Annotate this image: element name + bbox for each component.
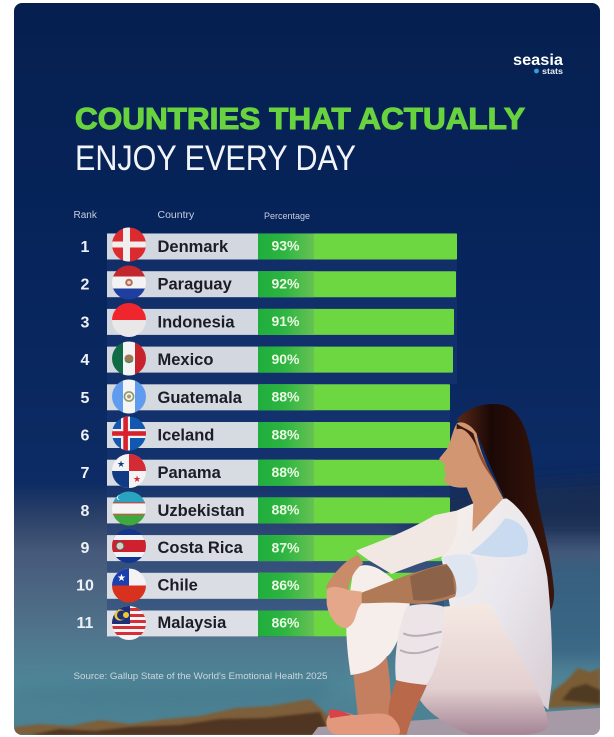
row 7: Panama: Panama [158,464,222,482]
icon: Chile flag [112,568,146,602]
row 1: Denmark: 93% [271,238,300,254]
row 9: Costa Rica: 9 [81,540,90,557]
near pant leg [395,604,444,685]
row 3: Indonesia: 91% [271,313,300,329]
row 10: Chile: 10 [76,578,94,594]
row 2: Paraguay: Paraguay [158,276,233,294]
row 3: Indonesia [81,303,454,337]
row 6: Iceland: Iceland [158,426,214,444]
logo: seasia stats [513,52,564,76]
row 1: Denmark [81,228,457,262]
row 7: Panama [81,454,450,488]
row 11: Malaysia: 11 [77,615,94,632]
row 5: Guatemala [81,380,450,414]
row 6: Iceland [81,416,450,450]
cuff [441,554,478,598]
row 5: Guatemala: Guatemala [158,389,243,407]
column headers: Percentage [264,211,310,221]
far forearm and hands [326,555,363,603]
row 2: Paraguay: 92% [271,276,300,292]
neck and face [439,422,503,532]
row 8: Uzbekistan: 88% [271,502,300,518]
row 8: Uzbekistan: 8 [81,503,90,520]
icon: Malaysia flag [112,606,146,640]
icon: Panama flag: ★ [133,474,141,484]
row 8: Uzbekistan [81,492,450,526]
near shin foot [388,680,427,735]
row 10: Chile [76,568,444,602]
icon: Panama flag [112,454,146,488]
icon: Costa Rica flag [112,529,146,563]
title [75,102,525,178]
row 2: Paraguay: 2 [81,277,90,294]
row 5: Guatemala: 88% [271,388,300,404]
hips and thigh [420,603,548,735]
row 10: Chile: Chile [158,576,198,594]
row 7: Panama: 88% [271,464,300,480]
source note: Source: Gallup State of the World's Emotional Health 2025 [74,671,328,682]
icon: Mexico flag [112,342,146,376]
row 9: Costa Rica: Costa Rica [158,539,244,557]
title: ENJOY EVERY DAY [75,139,356,178]
row 3: Indonesia: Indonesia [158,313,235,331]
photo: seated woman in white [326,404,554,735]
row 4: Mexico: 90% [271,351,300,367]
row 4: Mexico [81,342,453,376]
row 6: Iceland: 88% [271,426,300,442]
row 6: Iceland: 6 [81,428,90,444]
icon: Chile flag: ★ [117,573,126,584]
row 5: Guatemala: 5 [81,390,90,407]
hair back [457,404,554,613]
column headers: Country [158,209,195,221]
title: COUNTRIES THAT ACTUALLY [75,102,525,136]
row 1: Denmark: Denmark [158,238,229,256]
logo: seasia stats: seasia [513,52,563,69]
row 1: Denmark: 1 [81,239,90,256]
forearm [360,563,457,604]
row 8: Uzbekistan: Uzbekistan [158,502,245,520]
icon: Panama flag: ★ [117,459,125,469]
row 3: Indonesia: 3 [81,314,90,331]
table backing band [107,233,457,637]
icon: Paraguay flag [112,266,146,300]
row 9: Costa Rica: 87% [271,540,300,556]
row 11: Malaysia [78,606,346,640]
icon: Uzbekistan flag [112,492,146,526]
icon: Indonesia flag [112,303,146,337]
far leg [353,657,391,718]
icon: Guatemala flag [112,380,146,414]
column headers [74,209,310,221]
torso [442,498,552,710]
sleeve [356,511,458,574]
logo: seasia stats: stats [542,67,564,76]
row 11: Malaysia: Malaysia [158,614,227,632]
row 11: Malaysia: 86% [271,614,300,630]
row 10: Chile: 86% [271,577,300,593]
icon: Denmark flag [112,228,146,262]
row 2: Paraguay [81,266,456,300]
row 7: Panama: 7 [81,465,90,482]
row 4: Mexico: 4 [81,352,90,369]
row 9: Costa Rica [81,529,448,563]
row 4: Mexico: Mexico [158,351,213,369]
column headers: Rank [74,210,98,221]
icon: Iceland flag [112,416,146,450]
